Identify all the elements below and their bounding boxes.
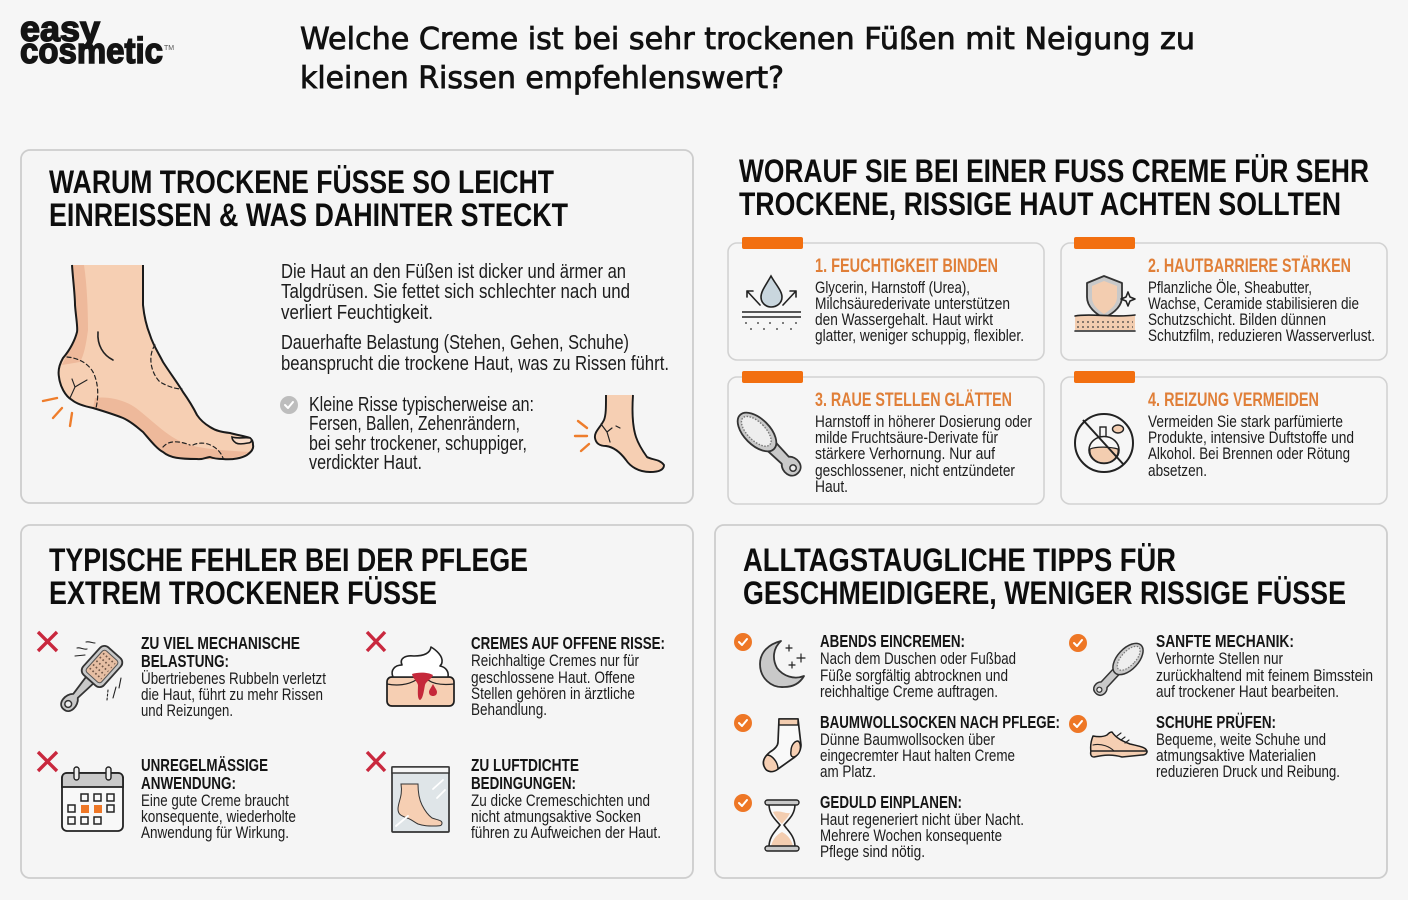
text block: skin explanation: beansprucht die trockene Haut, was zu Rissen führt. — [281, 352, 669, 375]
icon: orange check — [734, 633, 752, 651]
text block: small cracks — [309, 393, 534, 474]
icon: foot in plastic bag — [392, 767, 449, 832]
text: Milchsäurederivate unterstützen — [815, 295, 1010, 313]
icon: red cross — [367, 632, 385, 651]
card 1: Feuchtigkeit binden — [728, 237, 1044, 360]
heading: Tipps: ALLTAGSTAUGLICHE TIPPS FÜR — [743, 542, 1176, 578]
text block: skin explanation: verliert Feuchtigkeit. — [281, 301, 433, 324]
heading: Fehler: EXTREM TROCKENER FÜSSE — [49, 575, 437, 611]
icon: sock — [763, 719, 801, 772]
text: mechanische Belastung: die Haut, führt zu mehr Rissen — [141, 686, 323, 704]
icon: cream on wound — [387, 647, 454, 706]
text: Geduld einplanen: Haut regeneriert nicht über Nacht. — [820, 811, 1024, 829]
text block: small cracks: bei sehr trockener, schuppiger, — [309, 432, 527, 455]
icon: shield on skin — [1075, 276, 1135, 331]
text: mechanische Belastung: Übertriebenes Rubbeln verletzt — [141, 670, 326, 688]
logo: easy cosmetic: TM — [164, 45, 174, 52]
text — [1148, 279, 1375, 345]
text: offene Risse: geschlossene Haut. Offene — [471, 669, 635, 687]
heading: warum: WARUM TROCKENE FÜSSE SO LEICHT — [49, 164, 554, 200]
text: Schuhe prüfen: SCHUHE PRÜFEN: — [1156, 712, 1276, 732]
text: Alkohol. Bei Brennen oder Rötung — [1148, 445, 1350, 463]
text: sanfte Mechanik: Verhornte Stellen nur — [1156, 650, 1283, 668]
text: Baumwollsocken: eingecremter Haut halten Creme — [820, 747, 1015, 765]
text: luftdichte Bedingungen: BEDINGUNGEN: — [471, 773, 576, 793]
text: unregelmäßige Anwendung: ANWENDUNG: — [141, 773, 236, 793]
icon: orange check — [1069, 634, 1087, 652]
text block: small cracks: verdickter Haut. — [309, 451, 422, 474]
text: abends eincremen: ABENDS EINCREMEN: — [820, 631, 965, 651]
text — [815, 413, 1032, 496]
card 3: raue Stellen glätten — [728, 371, 1044, 504]
icon: orange check — [734, 794, 752, 812]
title — [300, 22, 1195, 96]
icon: hourglass — [765, 800, 799, 851]
text: Schuhe prüfen — [1156, 712, 1340, 781]
text: mechanische Belastung — [141, 633, 326, 720]
text: Geduld einplanen: Mehrere Wochen konsequente — [820, 827, 1002, 845]
icon: moon — [760, 641, 805, 687]
text block: small cracks: Kleine Risse typischerweise an: — [309, 393, 534, 416]
icon: calendar — [62, 767, 123, 831]
text: Baumwollsocken: am Platz. — [820, 763, 876, 781]
text: Harnstoff in höherer Dosierung oder — [815, 413, 1032, 431]
illustration: large foot with cracks — [43, 265, 253, 459]
text: Geduld einplanen — [820, 792, 1024, 861]
text: milde Fruchtsäure-Derivate für — [815, 429, 998, 447]
text: offene Risse: Behandlung. — [471, 701, 547, 719]
icon: red cross — [38, 752, 57, 771]
icon: orange check — [1069, 715, 1087, 733]
text: unregelmäßige Anwendung: konsequente, wiederholte — [141, 808, 296, 826]
panel: typische Fehler — [21, 525, 693, 878]
text block: skin explanation: Die Haut an den Füßen ist dicker und ärmer an — [281, 260, 626, 283]
text: geschlossener, nicht entzündeter — [815, 462, 1015, 480]
text — [1148, 413, 1354, 480]
heading: 3. RAUE STELLEN GLÄTTEN — [815, 390, 1012, 411]
title: Welche Creme ist bei sehr trockenen Füßen mit Neigung zu — [300, 22, 1195, 57]
icon: pumice brush — [1088, 638, 1149, 701]
text: unregelmäßige Anwendung: Eine gute Creme braucht — [141, 792, 289, 810]
text: luftdichte Bedingungen: Zu dicke Cremeschichten und — [471, 792, 650, 810]
heading: warum — [49, 164, 568, 233]
text: luftdichte Bedingungen: ZU LUFTDICHTE — [471, 755, 579, 775]
icon: grey check — [280, 396, 298, 414]
text: Geduld einplanen: GEDULD EINPLANEN: — [820, 792, 962, 812]
text: Produkte, intensive Duftstoffe und — [1148, 429, 1354, 447]
heading: 4. REIZUNG VERMEIDEN — [1148, 390, 1319, 411]
text: offene Risse: Stellen gehören in ärztliche — [471, 685, 635, 703]
icon: no perfume — [1075, 414, 1133, 472]
text: unregelmäßige Anwendung: UNREGELMÄSSIGE — [141, 755, 268, 775]
text: sanfte Mechanik: SANFTE MECHANIK: — [1156, 631, 1294, 651]
text: sanfte Mechanik: zurückhaltend mit feinem Bimsstein — [1156, 667, 1373, 685]
icon: shoe — [1091, 732, 1147, 757]
text: den Wassergehalt. Haut wirkt — [815, 311, 993, 329]
heading: Tipps — [743, 542, 1346, 611]
text: abends eincremen: Füße sorgfältig abtrocknen und — [820, 667, 1008, 685]
heading: Fehler: TYPISCHE FEHLER BEI DER PFLEGE — [49, 542, 528, 578]
text: stärkere Verhornung. Nur auf — [815, 445, 995, 463]
text: Geduld einplanen: Pflege sind nötig. — [820, 843, 925, 861]
text: Glycerin, Harnstoff (Urea), — [815, 279, 970, 297]
text block: small cracks: Fersen, Ballen, Zehenrändern, — [309, 412, 520, 435]
heading: Fehler — [49, 542, 528, 611]
illustration: small heel — [575, 395, 664, 472]
text: Baumwollsocken: Dünne Baumwollsocken über — [820, 731, 995, 749]
text block: skin explanation: Talgdrüsen. Sie fettet sich schlechter nach und — [281, 280, 630, 303]
text: Schuhe prüfen: Bequeme, weite Schuhe und — [1156, 731, 1326, 749]
icon: red cross — [367, 752, 385, 771]
text: luftdichte Bedingungen: führen zu Aufweichen der Haut. — [471, 824, 661, 842]
text: unregelmäßige Anwendung: Anwendung für Wirkung. — [141, 824, 289, 842]
panel: alltagstaugliche Tipps — [715, 525, 1387, 878]
text: luftdichte Bedingungen: nicht atmungsaktive Socken — [471, 808, 641, 826]
icon: water drop — [742, 276, 801, 329]
title: kleinen Rissen empfehlenswert? — [300, 61, 784, 96]
text: luftdichte Bedingungen — [471, 755, 661, 842]
text block: skin explanation: Dauerhafte Belastung (Stehen, Gehen, Schuhe) — [281, 331, 629, 354]
text: Schuhe prüfen: reduzieren Druck und Reibung. — [1156, 763, 1340, 781]
text: offene Risse — [471, 633, 665, 719]
text: Wachse, Ceramide stabilisieren die — [1148, 295, 1359, 313]
logo: easy cosmetic — [20, 8, 174, 71]
card 2: Hautbarriere stärken — [1061, 237, 1387, 360]
icon: rasp — [53, 642, 125, 719]
text: Pflanzliche Öle, Sheabutter, — [1148, 279, 1312, 297]
text: sanfte Mechanik: auf trockener Haut bearbeiten. — [1156, 683, 1339, 701]
text: abends eincremen: Nach dem Duschen oder Fußbad — [820, 650, 1016, 668]
icon: red cross — [38, 632, 57, 651]
text: Schuhe prüfen: atmungsaktive Materialien — [1156, 747, 1316, 765]
text: Baumwollsocken: BAUMWOLLSOCKEN NACH PFLEGE: — [820, 712, 1060, 732]
text block: skin explanation — [281, 260, 669, 375]
text: abends eincremen — [820, 631, 1016, 701]
text: glatter, weniger schuppig, flexibler. — [815, 327, 1024, 345]
icon: orange check — [734, 714, 752, 732]
text: unregelmäßige Anwendung — [141, 755, 296, 842]
text: absetzen. — [1148, 462, 1207, 480]
text: Vermeiden Sie stark parfümierte — [1148, 413, 1343, 431]
text: Baumwollsocken — [820, 712, 1060, 781]
text: mechanische Belastung: BELASTUNG: — [141, 651, 229, 671]
icon: foot file — [731, 406, 807, 482]
text: Schutzschicht. Bilden dünnen — [1148, 311, 1326, 329]
heading: 1. FEUCHTIGKEIT BINDEN — [815, 256, 998, 277]
text: mechanische Belastung: und Reizungen. — [141, 702, 233, 720]
logo: easy cosmetic: easy — [20, 8, 100, 49]
text: mechanische Belastung: ZU VIEL MECHANISCHE — [141, 633, 300, 653]
panel: warum trockene Füße einreißen — [21, 150, 693, 503]
card 4: Reizung vermeiden — [1061, 371, 1387, 504]
logo: easy cosmetic: cosmetic — [20, 30, 163, 71]
text: sanfte Mechanik — [1156, 631, 1373, 701]
text — [815, 279, 1024, 345]
text: Haut. — [815, 478, 848, 496]
text: abends eincremen: reichhaltige Creme auftragen. — [820, 683, 998, 701]
heading: worauf achten — [739, 153, 1369, 222]
text: offene Risse: Reichhaltige Cremes nur für — [471, 652, 639, 670]
text: offene Risse: CREMES AUF OFFENE RISSE: — [471, 633, 665, 653]
heading: warum: EINREISSEN & WAS DAHINTER STECKT — [49, 197, 568, 233]
